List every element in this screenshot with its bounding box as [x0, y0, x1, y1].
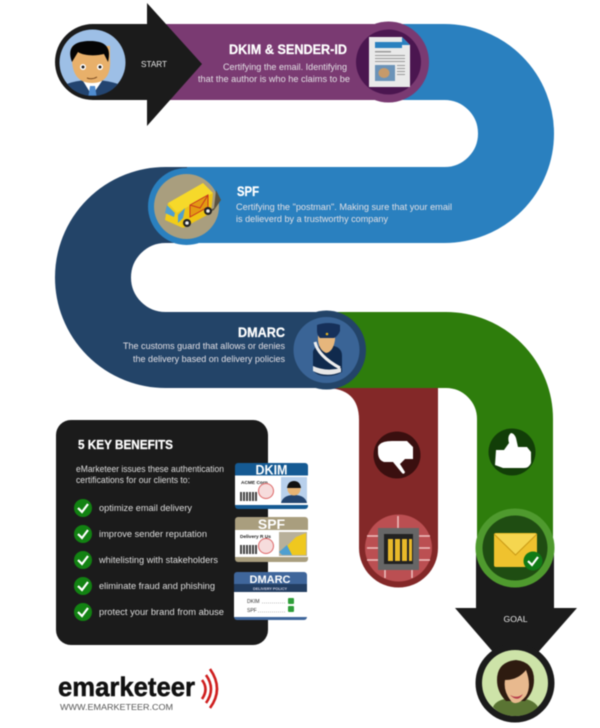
step: SPF text: Certifying the "postman". Making sure that your email: [236, 202, 452, 213]
step: DKIM & Sender-ID text: [198, 42, 350, 85]
goal column and arrow: [455, 550, 577, 678]
benefit: optimize: optimize email delivery: [99, 503, 192, 514]
step: SPF truck icon: [148, 168, 225, 245]
benefit: optimize: [74, 499, 192, 517]
panel: 5 key benefits: [56, 420, 268, 645]
card: DKIM: DKIM: [256, 462, 288, 478]
card: SPF: [235, 516, 308, 562]
panel intro text: [76, 464, 224, 486]
panel heading: 5 KEY BENEFITS: [78, 437, 173, 452]
benefit: reputation: [74, 525, 207, 543]
card: DMARC: DMARC: [250, 574, 291, 586]
icon: customs guard: [287, 310, 366, 390]
step: DKIM & Sender-ID text: Certifying the email. Identifying: [223, 62, 347, 73]
road: red denied branch: [325, 388, 438, 588]
step: DKIM & Sender-ID text: that the author is who he claims to be: [198, 74, 350, 85]
card: DMARC: DKIM: [247, 599, 260, 605]
start arrow: [55, 3, 202, 126]
icon: thumbs up: [488, 428, 536, 476]
benefit: fraud: eliminate fraud and phishing: [99, 581, 215, 592]
benefit: brand: [74, 603, 224, 621]
step: SPF text: is delieverd by a trustworthy company: [236, 214, 388, 225]
icon: jailed envelope: [365, 514, 432, 582]
icon: thumbs down: [374, 432, 420, 478]
card: DMARC: SPF: [247, 608, 257, 614]
benefit: brand: protect your brand from abuse: [99, 607, 224, 618]
icon: start avatar man: [60, 30, 126, 96]
road: navy segment: [93, 205, 327, 350]
step: DMARC text: The customs guard that allows or denies: [123, 341, 285, 352]
step: SPF text: [236, 184, 452, 225]
icon: newspaper document: [348, 22, 429, 102]
step: DMARC text: the delivery based on delivery policies: [133, 354, 285, 365]
panel intro text: eMarketeer issues these authentication: [76, 464, 224, 475]
card: DMARC: DELIVERY POLICY: [253, 587, 287, 591]
card: SPF: Delivery R Us: [240, 534, 271, 540]
icon: goal avatar woman: [476, 644, 554, 722]
logo: emarketeer: [58, 669, 217, 712]
start label: START: [141, 59, 167, 69]
card: SPF: SPF: [258, 516, 286, 532]
benefit: whitelisting: whitelisting with stakeholders: [98, 555, 218, 566]
step: DMARC text: [123, 325, 285, 365]
card: DMARC: [234, 572, 307, 620]
road: green approved branch: [327, 350, 515, 556]
logo: emarketeer: WWW.EMARKETEER.COM: [60, 703, 173, 712]
logo: emarketeer: emarketeer: [58, 672, 195, 702]
step: DMARC text: DMARC: [238, 325, 285, 340]
benefit: reputation: improve sender reputation: [99, 529, 207, 540]
road: blue segment: [186, 62, 516, 205]
card: DKIM: ACME Corp: [241, 480, 268, 486]
icon: approved envelope: [476, 508, 554, 588]
panel intro text: certifications for our clients to:: [76, 475, 190, 486]
benefit: fraud: [74, 577, 215, 595]
card: DKIM: [235, 462, 308, 509]
benefit: whitelisting: [74, 551, 218, 569]
step: DKIM & Sender-ID text: DKIM & SENDER-ID: [229, 42, 347, 57]
goal label: GOAL: [504, 614, 528, 624]
road: purple segment: [150, 24, 388, 100]
step: SPF text: SPF: [237, 184, 259, 199]
